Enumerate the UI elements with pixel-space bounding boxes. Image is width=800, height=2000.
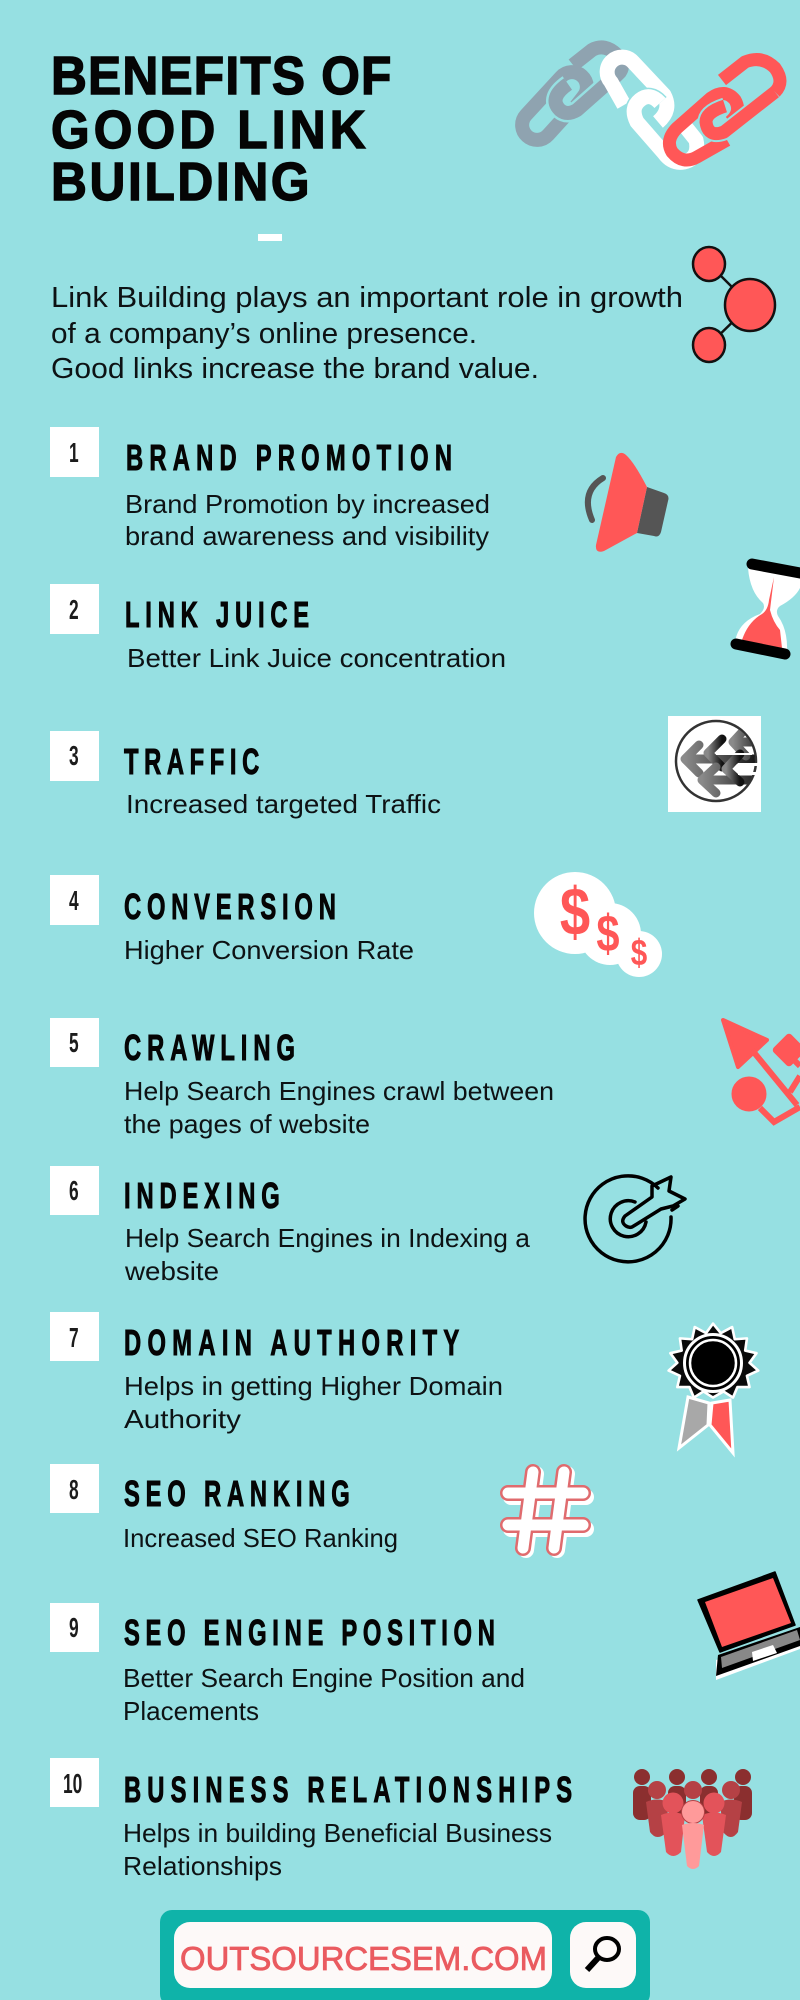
website search bar: OUTSOURCESEM.COM [180,1940,547,1977]
search button [570,1922,636,1988]
item 6: indexing [50,1166,531,1286]
item 1: brand promotion [50,427,490,551]
item 9: seo engine position: Better Search Engine Position and [123,1663,525,1693]
website address pill [174,1922,552,1988]
item 3: traffic: TRAFFIC [124,742,259,782]
item 10: business relationships: Helps in building Beneficial Business [123,1818,552,1848]
item 2: link juice: LINK JUICE [125,595,309,635]
title: BUILDING [51,151,310,211]
item 2: link juice: Better Link Juice concentration [127,643,506,673]
item 7: domain authority: 7 [69,1322,79,1353]
item 2: link juice [50,584,506,673]
item 5: crawling: Help Search Engines crawl between [124,1076,554,1106]
item 8: seo ranking: 8 [69,1474,79,1505]
icon: money [534,872,662,977]
item 5: crawling [50,1018,554,1139]
item 3: traffic [50,731,441,819]
item 10: business relationships [50,1758,572,1881]
item 4: conversion: CONVERSION [124,887,336,927]
item 1: brand promotion: BRAND PROMOTION [126,438,452,478]
website search bar [160,1910,650,2000]
item 3: traffic: 3 [69,740,79,771]
item 1: brand promotion: Brand Promotion by increased [125,489,490,519]
icon: chain links [522,47,780,162]
item 5: crawling: the pages of website [124,1109,370,1139]
divider dash [258,234,282,241]
icon: megaphone [588,453,668,552]
item 9: seo engine position: Placements [123,1696,259,1726]
item 8: seo ranking [50,1464,398,1553]
item 4: conversion: 4 [69,885,79,916]
icon: hourglass [735,564,800,654]
icon: award badge [669,1324,758,1453]
item 3: traffic: Increased targeted Traffic [126,789,441,819]
item 2: link juice: 2 [69,594,79,625]
item 5: crawling: CRAWLING [124,1028,295,1068]
item 6: indexing: INDEXING [124,1176,280,1216]
item 6: indexing: 6 [69,1175,79,1206]
item 8: seo ranking: SEO RANKING [124,1474,350,1514]
title: GOOD LINK [51,99,366,159]
title: BENEFITS OF [51,45,391,105]
item 7: domain authority: DOMAIN AUTHORITY [124,1323,459,1363]
intro text: of a company’s online presence. [51,318,477,350]
item 8: seo ranking: Increased SEO Ranking [123,1523,398,1553]
item 6: indexing: Help Search Engines in Indexing a [125,1223,531,1253]
icon: network nodes [693,247,775,362]
item 6: indexing: website [124,1256,219,1286]
item 1: brand promotion: 1 [69,437,79,468]
item 7: domain authority: Authority [124,1404,241,1434]
icon: target dart [585,1176,685,1262]
item 9: seo engine position: 9 [69,1612,79,1643]
item 10: business relationships: Relationships [123,1851,282,1881]
item 10: business relationships: 10 [63,1768,82,1799]
icon: hashtag [508,1472,586,1550]
item 1: brand promotion: brand awareness and visibility [125,521,489,551]
item 9: seo engine position [50,1603,525,1726]
icon: money: $ [631,933,648,974]
title [51,45,391,211]
intro text: Good links increase the brand value. [51,353,539,385]
item 5: crawling: 5 [69,1027,79,1058]
icon: people group [633,1769,752,1869]
icon: laptop [698,1572,800,1680]
intro text [51,282,683,385]
icon: traffic arrows [668,716,765,812]
intro text: Link Building plays an important role in growth [51,282,683,314]
item 4: conversion [50,875,414,965]
icon: magnifier [587,1938,619,1970]
icon: usb arrows [723,1020,800,1122]
item 10: business relationships: BUSINESS RELATIONSHIPS [124,1770,572,1810]
item 4: conversion: Higher Conversion Rate [124,935,414,965]
icon: money: $ [596,904,620,962]
item 9: seo engine position: SEO ENGINE POSITION [124,1613,495,1653]
item 7: domain authority [50,1312,503,1434]
item 7: domain authority: Helps in getting Higher Domain [124,1371,503,1401]
icon: money: $ [560,874,590,950]
